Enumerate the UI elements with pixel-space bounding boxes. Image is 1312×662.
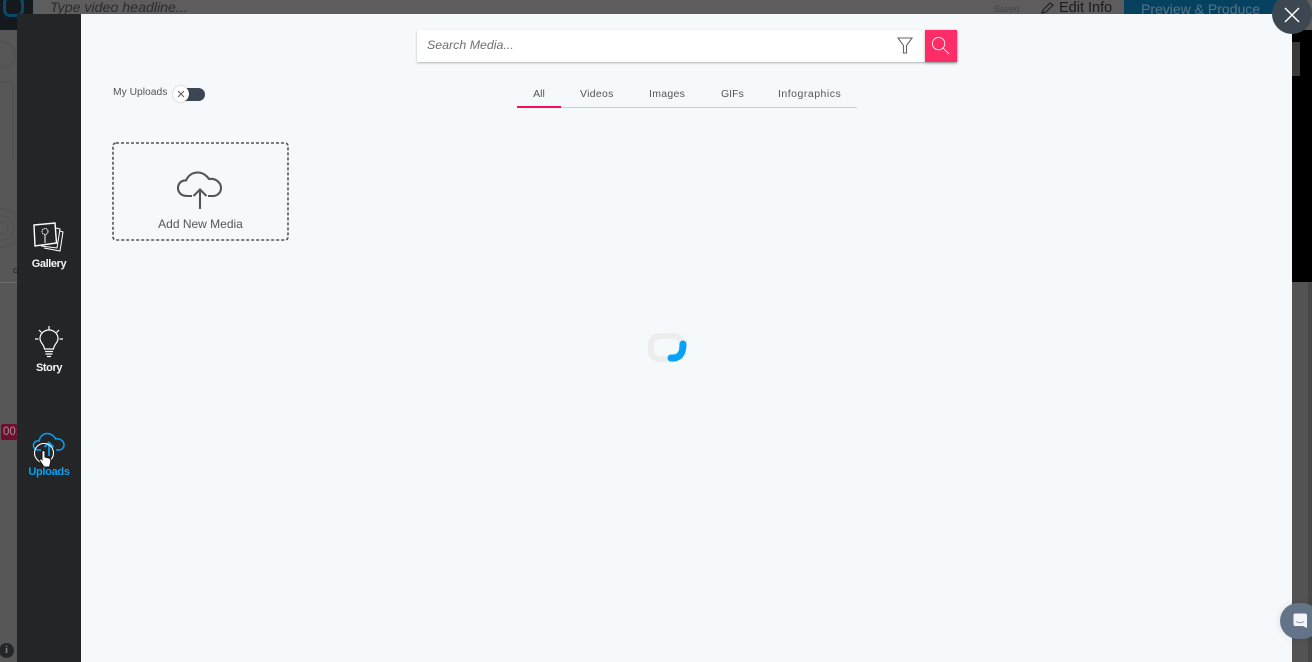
- left fragment label: c: [13, 265, 18, 275]
- logo ring: [3, 0, 24, 17]
- timecode tag: [1, 424, 17, 440]
- label: uploads: Uploads: [28, 466, 70, 478]
- toggle track: [175, 88, 205, 101]
- icon: info badge: i: [5, 644, 8, 656]
- tab: images: Images: [649, 88, 685, 100]
- loading spinner: [648, 333, 686, 362]
- icon: gallery: [33, 222, 64, 252]
- icon: chat bubble: [1294, 614, 1307, 628]
- toggle knob: [173, 86, 189, 102]
- saved status: Saved: [994, 4, 1020, 14]
- icon: click cursor: [34, 443, 54, 468]
- left timeline divider: [0, 282, 17, 283]
- tab: all: All: [533, 88, 545, 100]
- tab: gifs: GIFs: [721, 88, 744, 100]
- toggle: my uploads: [113, 85, 205, 103]
- card: add new media: [112, 142, 289, 241]
- icon: light bulb: [35, 326, 63, 358]
- preview button: Preview & Produce: [1141, 1, 1260, 17]
- icon: info badge: [0, 643, 14, 658]
- close button: [1272, 0, 1312, 34]
- icon: cloud upload: [176, 172, 222, 209]
- panel: sidebar: [17, 14, 81, 662]
- nav item: gallery: [32, 222, 66, 270]
- label: gallery: Gallery: [32, 258, 66, 270]
- tab: all: [517, 84, 561, 108]
- icon: filter: [897, 38, 913, 54]
- icon: magnifier: [932, 37, 950, 54]
- icon: close: [1284, 8, 1300, 22]
- icon: cross: [178, 90, 184, 98]
- search button: [925, 30, 957, 62]
- card label: Add New Media: [158, 217, 243, 231]
- darker column: [1308, 282, 1312, 662]
- logo block: [0, 0, 33, 30]
- headline placeholder: Type video headline...: [50, 0, 188, 16]
- top bar: [0, 0, 1312, 30]
- chat widget: [1280, 603, 1312, 639]
- search placeholder: Search Media...: [427, 38, 514, 52]
- dark block: [1292, 42, 1300, 76]
- preview button: [1124, 0, 1294, 30]
- icon: pencil: [1041, 2, 1054, 14]
- tab: videos: Videos: [580, 88, 614, 100]
- tab: infographics: Infographics: [778, 88, 841, 100]
- search bar: [417, 30, 957, 62]
- left decorative rings: [0, 30, 17, 270]
- edit info: Edit Info: [1059, 0, 1112, 16]
- tabs: [517, 84, 857, 108]
- toggle label: My Uploads: [113, 87, 167, 98]
- nav item: uploads: [28, 432, 70, 478]
- right black region: [1292, 30, 1312, 282]
- icon: upload cloud: [32, 432, 65, 456]
- right lower strip: [1292, 282, 1312, 662]
- label: story: Story: [36, 362, 62, 374]
- dashed card border: [112, 142, 289, 241]
- nav item: story: [35, 326, 63, 374]
